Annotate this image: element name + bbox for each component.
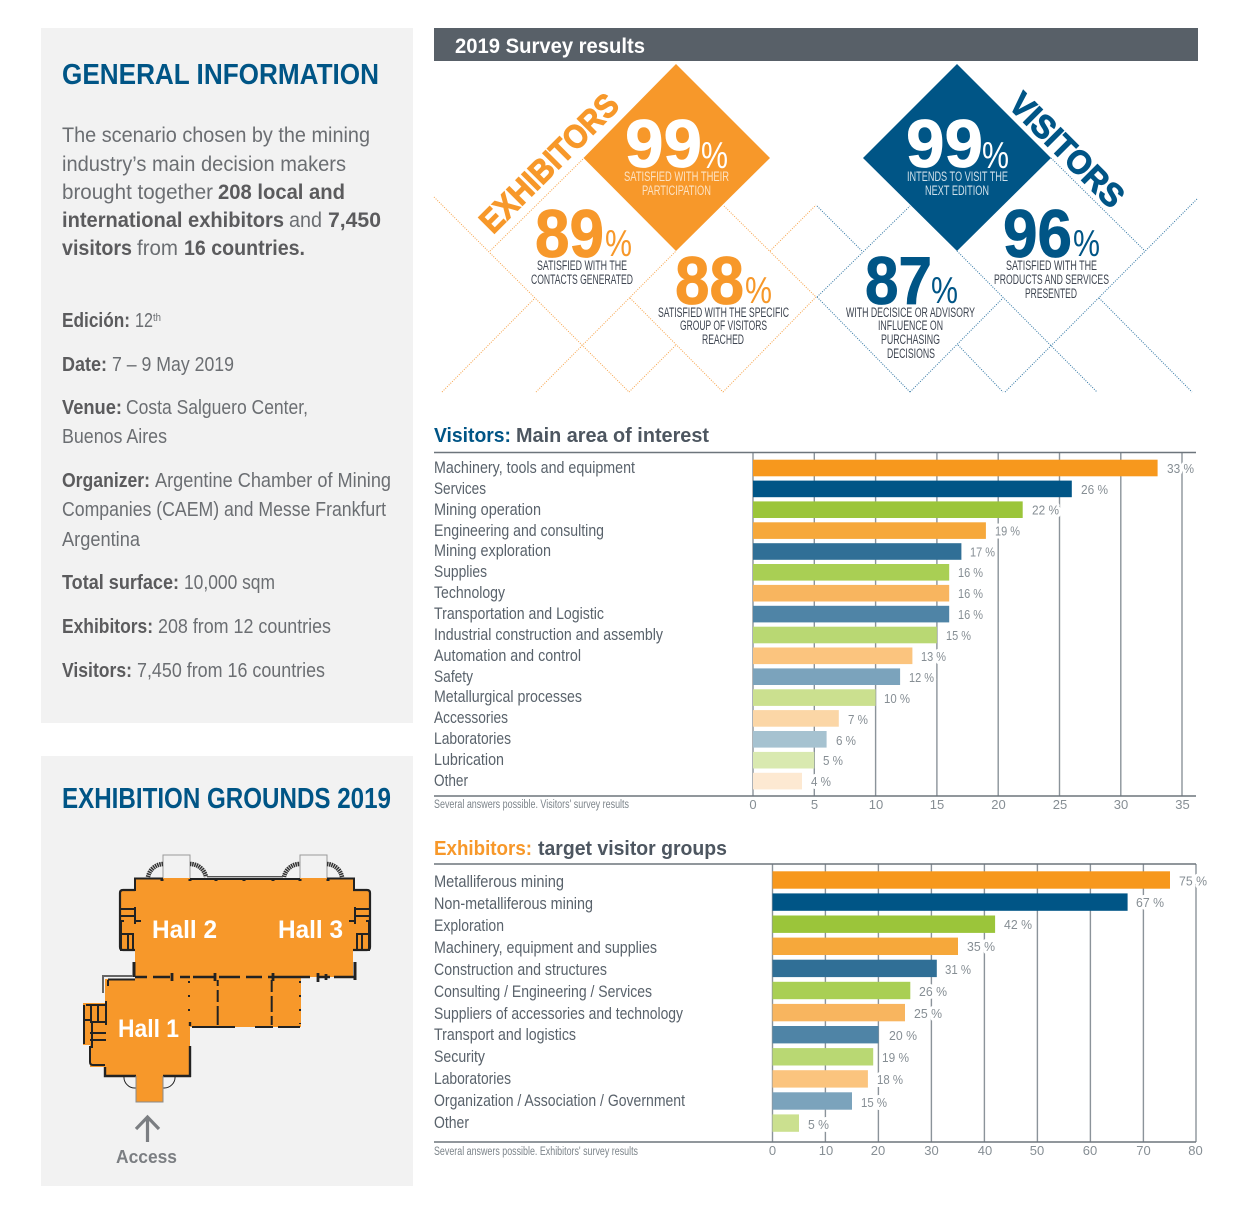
row: organization / association / government: Organization / Association / Government xyxy=(434,1091,685,1110)
row: lubrication: 5 % xyxy=(823,753,843,768)
row: exploration: 42 % xyxy=(1004,917,1032,932)
panel: visitors satisfaction diamonds xyxy=(817,64,1198,392)
icon: access arrow xyxy=(136,1117,159,1142)
panel: exhibition grounds xyxy=(41,756,413,1186)
axis labels: 40 xyxy=(978,1143,992,1158)
text block: organizer: Companies (CAEM) and Messe Frankfurt xyxy=(62,499,386,521)
stat: 88%: REACHED xyxy=(702,332,744,347)
row: transportation and logistic xyxy=(434,604,983,623)
diamond: visitors 99%: % xyxy=(982,135,1009,176)
row: construction and structures xyxy=(434,960,971,979)
text block: total surface xyxy=(62,572,275,594)
text block: introduction: The scenario chosen by the mining xyxy=(62,124,370,147)
row: accessories: Accessories xyxy=(434,708,508,727)
text block: organizer: Argentina xyxy=(62,529,141,551)
heading: visitors main area of interest xyxy=(434,425,709,447)
floor plan xyxy=(83,855,370,1102)
row: technology xyxy=(434,583,983,602)
stat: 88%: SATISFIED WITH THE SPECIFIC xyxy=(658,305,789,320)
row: accessories xyxy=(434,708,868,727)
row: services xyxy=(434,479,1108,498)
label: hall 1: Hall 1 xyxy=(118,1015,179,1043)
bar chart: exhibitors target visitor groups xyxy=(434,864,1207,1158)
stat: 96%: PRODUCTS AND SERVICES xyxy=(994,272,1109,287)
row: safety: Safety xyxy=(434,667,473,686)
panel: exhibitors satisfaction diamonds xyxy=(434,64,816,392)
axis labels: 5 xyxy=(811,797,818,812)
label: hall 2: Hall 2 xyxy=(152,916,217,944)
axis labels: 70 xyxy=(1136,1143,1151,1158)
diamond: visitors 99%: INTENDS TO VISIT THE xyxy=(907,169,1008,184)
row: machinery, equipment and supplies: Machinery, equipment and supplies xyxy=(434,938,657,957)
heading: general information: GENERAL INFORMATION xyxy=(62,59,379,91)
stat: 96%: SATISFIED WITH THE xyxy=(1006,258,1097,273)
row: transportation and logistic: Transportation and Logistic xyxy=(434,604,604,623)
row: safety xyxy=(434,667,934,686)
text block: exhibitors: Exhibitors: xyxy=(62,616,153,638)
text block: introduction: international exhibitors xyxy=(62,209,284,232)
row: other: 5 % xyxy=(808,1117,829,1132)
row: safety: 12 % xyxy=(909,670,934,685)
row: construction and structures: Construction and structures xyxy=(434,960,607,979)
row: other xyxy=(434,771,831,790)
row: non-metalliferous mining: Non-metalliferous mining xyxy=(434,894,593,913)
stat: 96% xyxy=(994,196,1109,301)
text block: organizer xyxy=(62,470,391,551)
text block: introduction: visitors xyxy=(62,237,132,260)
panel: general information xyxy=(41,28,413,723)
row: lubrication: Lubrication xyxy=(434,750,504,769)
text block: exhibitors: 208 from 12 countries xyxy=(158,616,331,638)
axis labels: 20 xyxy=(871,1143,885,1158)
text block: total surface: Total surface: xyxy=(62,572,179,594)
row: transport and logistics: 20 % xyxy=(889,1028,917,1043)
stat: 87%: WITH DECISICE OR ADVISORY xyxy=(846,305,975,320)
row: non-metalliferous mining: 67 % xyxy=(1136,895,1164,910)
header bar: survey results xyxy=(434,28,1198,61)
row: technology: 16 % xyxy=(958,586,983,601)
text block: date: 7 – 9 May 2019 xyxy=(112,354,234,376)
row: mining operation: Mining operation xyxy=(434,500,541,519)
heading: exhibition grounds: EXHIBITION GROUNDS 2019 xyxy=(62,783,391,815)
row: machinery, equipment and supplies xyxy=(434,938,995,957)
row: organization / association / government xyxy=(434,1091,887,1110)
stat: 88%: 88 xyxy=(675,243,744,319)
text block: visitors xyxy=(62,660,325,682)
row: other: Other xyxy=(434,1113,469,1132)
stat: 88% xyxy=(658,243,789,347)
row: machinery, tools and equipment: Machinery, tools and equipment xyxy=(434,458,635,477)
row: suppliers of accessories and technology xyxy=(434,1004,942,1023)
row: suppliers of accessories and technology: 25 % xyxy=(914,1006,942,1021)
row: laboratories: Laboratories xyxy=(434,729,511,748)
stat: 96%: PRESENTED xyxy=(1025,286,1077,301)
row: machinery, tools and equipment xyxy=(434,458,1194,477)
row: mining exploration: 17 % xyxy=(970,544,995,560)
text block: visitors: Visitors: xyxy=(62,660,132,682)
text block: introduction: 208 local and xyxy=(218,181,345,204)
row: services: 26 % xyxy=(1081,482,1108,497)
row: other xyxy=(434,1113,829,1132)
label: hall 3: Hall 3 xyxy=(278,916,343,944)
text block: venue: Costa Salguero Center, xyxy=(126,397,308,419)
stat: 96%: 96 xyxy=(1003,196,1072,272)
text block: edition: th xyxy=(153,312,161,324)
heading: visitors main area of interest: Main area of interest xyxy=(516,425,709,447)
stat: 87%: PURCHASING xyxy=(881,332,940,347)
row: lubrication xyxy=(434,750,843,769)
row: other: Other xyxy=(434,771,468,790)
text block: exhibitors xyxy=(62,616,331,638)
diamond: exhibitors 99%: % xyxy=(701,135,728,176)
row: machinery, equipment and supplies: 35 % xyxy=(967,939,995,954)
stat: 87%: % xyxy=(931,270,958,311)
heading: exhibitors target visitor groups: Exhibitors: xyxy=(434,838,532,860)
heading: visitors main area of interest: Visitors: xyxy=(434,425,511,447)
axis labels: 25 xyxy=(1053,797,1067,812)
axis labels: 10 xyxy=(819,1143,833,1158)
row: technology: Technology xyxy=(434,583,505,602)
text block: introduction: industry’s main decision makers xyxy=(62,153,346,176)
stat: 88%: % xyxy=(745,270,772,311)
diamond: visitors 99%: NEXT EDITION xyxy=(925,183,989,198)
diamond: visitors 99% xyxy=(863,64,1051,251)
diamond: visitors 99%: 99 xyxy=(906,106,983,182)
axis labels: 20 xyxy=(991,797,1006,812)
row: laboratories xyxy=(434,729,856,748)
row: supplies: Supplies xyxy=(434,562,487,581)
stat: 89%: CONTACTS GENERATED xyxy=(531,272,633,287)
header bar: survey results: 2019 Survey results xyxy=(455,35,645,58)
text block: date xyxy=(62,354,234,376)
text block: venue: Venue: xyxy=(62,397,122,419)
text block: venue xyxy=(62,397,308,448)
axis labels: 30 xyxy=(1114,797,1128,812)
row: consulting / engineering / services: Consulting / Engineering / Services xyxy=(434,982,652,1001)
diamond: exhibitors 99%: SATISFIED WITH THEIR xyxy=(624,169,729,184)
row: exploration xyxy=(434,916,1032,935)
text block: venue: Buenos Aires xyxy=(62,426,167,448)
row: organization / association / government: 15 % xyxy=(861,1095,887,1110)
source note: Several answers possible. Exhibitors' survey results xyxy=(434,1146,638,1158)
text block: introduction: and xyxy=(289,209,322,232)
stat: 96%: % xyxy=(1073,223,1100,264)
text block: date: Date: xyxy=(62,354,107,376)
row: engineering and consulting xyxy=(434,521,1020,540)
source note: Several answers possible. Visitors' survey results xyxy=(434,799,629,811)
diamond: exhibitors 99%: PARTICIPATION xyxy=(642,183,711,198)
label: visitors: VISITORS xyxy=(1002,85,1132,215)
row: laboratories xyxy=(434,1069,903,1088)
text block: organizer: Argentine Chamber of Mining xyxy=(155,470,391,492)
row: mining exploration: Mining exploration xyxy=(434,541,551,560)
axis labels: 60 xyxy=(1083,1143,1097,1158)
text block: introduction: 7,450 xyxy=(328,209,381,232)
row: mining operation xyxy=(434,500,1059,519)
row: suppliers of accessories and technology: Suppliers of accessories and technology xyxy=(434,1004,683,1023)
row: engineering and consulting: 19 % xyxy=(995,524,1020,538)
text block: visitors: 7,450 from 16 countries xyxy=(137,660,325,682)
row: automation and control: 13 % xyxy=(921,649,946,664)
row: mining operation: 22 % xyxy=(1032,502,1059,518)
axis labels: 0 xyxy=(749,797,757,812)
row: transport and logistics xyxy=(434,1025,917,1044)
row: security: Security xyxy=(434,1047,485,1066)
row: mining exploration xyxy=(434,541,995,560)
stat: 87%: DECISIONS xyxy=(887,346,935,361)
axis labels: 0 xyxy=(769,1143,776,1158)
row: metallurgical processes: 10 % xyxy=(884,691,910,706)
row: laboratories: 18 % xyxy=(877,1072,903,1087)
row: supplies: 16 % xyxy=(958,565,983,580)
row: transportation and logistic: 16 % xyxy=(958,607,983,622)
bar chart: visitors main area of interest xyxy=(434,452,1196,812)
row: industrial construction and assembly: Industrial construction and assembly xyxy=(434,625,663,644)
text block: total surface: 10,000 sqm xyxy=(184,572,275,594)
stat: 87% xyxy=(846,243,975,361)
text block: introduction xyxy=(62,124,381,260)
row: services: Services xyxy=(434,479,486,498)
row: consulting / engineering / services: 26 % xyxy=(919,984,947,999)
axis labels: 15 xyxy=(930,797,944,812)
axis labels: 10 xyxy=(869,797,883,812)
axis labels xyxy=(749,797,1190,812)
label: access: Access xyxy=(116,1147,177,1167)
row: machinery, tools and equipment: 33 % xyxy=(1167,461,1194,476)
axis labels: 50 xyxy=(1030,1143,1044,1158)
row: construction and structures: 31 % xyxy=(945,962,971,977)
label: exhibitors: EXHIBITORS xyxy=(472,86,626,240)
diamond: exhibitors 99%: 99 xyxy=(625,106,702,182)
text block: edition: 12 xyxy=(135,310,153,332)
row: metalliferous mining: 75 % xyxy=(1179,874,1207,888)
heading: exhibitors target visitor groups: target visitor groups xyxy=(538,838,727,860)
text block: edition: Edición: xyxy=(62,310,130,332)
stat: 89%: SATISFIED WITH THE xyxy=(537,258,627,273)
row: laboratories: 6 % xyxy=(836,733,856,748)
axis labels: 30 xyxy=(924,1143,939,1158)
row: security xyxy=(434,1047,909,1066)
row: security: 19 % xyxy=(882,1050,909,1065)
stat: 89%: % xyxy=(605,223,632,264)
row: metallurgical processes xyxy=(434,687,910,706)
row: automation and control xyxy=(434,646,946,665)
axis labels xyxy=(769,1143,1203,1158)
row: consulting / engineering / services xyxy=(434,982,947,1001)
row: other: 4 % xyxy=(811,774,831,789)
row: industrial construction and assembly: 15 % xyxy=(946,628,971,643)
text block: introduction: brought together xyxy=(62,181,213,204)
row: metalliferous mining xyxy=(434,871,1207,891)
stat: 89% xyxy=(531,196,633,287)
text block: introduction: from xyxy=(137,237,178,260)
diamond: exhibitors 99% xyxy=(584,64,770,251)
row: exploration: Exploration xyxy=(434,916,504,935)
row: automation and control: Automation and control xyxy=(434,646,581,665)
row: laboratories: Laboratories xyxy=(434,1069,511,1088)
axis labels: 35 xyxy=(1175,797,1190,812)
stat: 87%: 87 xyxy=(865,243,932,319)
stat: 88%: GROUP OF VISITORS xyxy=(680,318,767,333)
heading: exhibitors target visitor groups xyxy=(434,838,727,860)
row: industrial construction and assembly xyxy=(434,625,971,644)
row: non-metalliferous mining xyxy=(434,893,1164,913)
row: accessories: 7 % xyxy=(848,712,868,727)
row: engineering and consulting: Engineering and consulting xyxy=(434,521,604,540)
row: supplies xyxy=(434,562,983,581)
row: metalliferous mining: Metalliferous mining xyxy=(434,872,564,891)
axis labels: 80 xyxy=(1188,1143,1203,1158)
row: metallurgical processes: Metallurgical processes xyxy=(434,687,582,706)
stat: 89%: 89 xyxy=(535,196,604,272)
text block: introduction: 16 countries. xyxy=(184,237,305,260)
stat: 87%: INFLUENCE ON xyxy=(878,318,943,333)
row: transport and logistics: Transport and logistics xyxy=(434,1025,576,1044)
text block: organizer: Organizer: xyxy=(62,470,150,492)
